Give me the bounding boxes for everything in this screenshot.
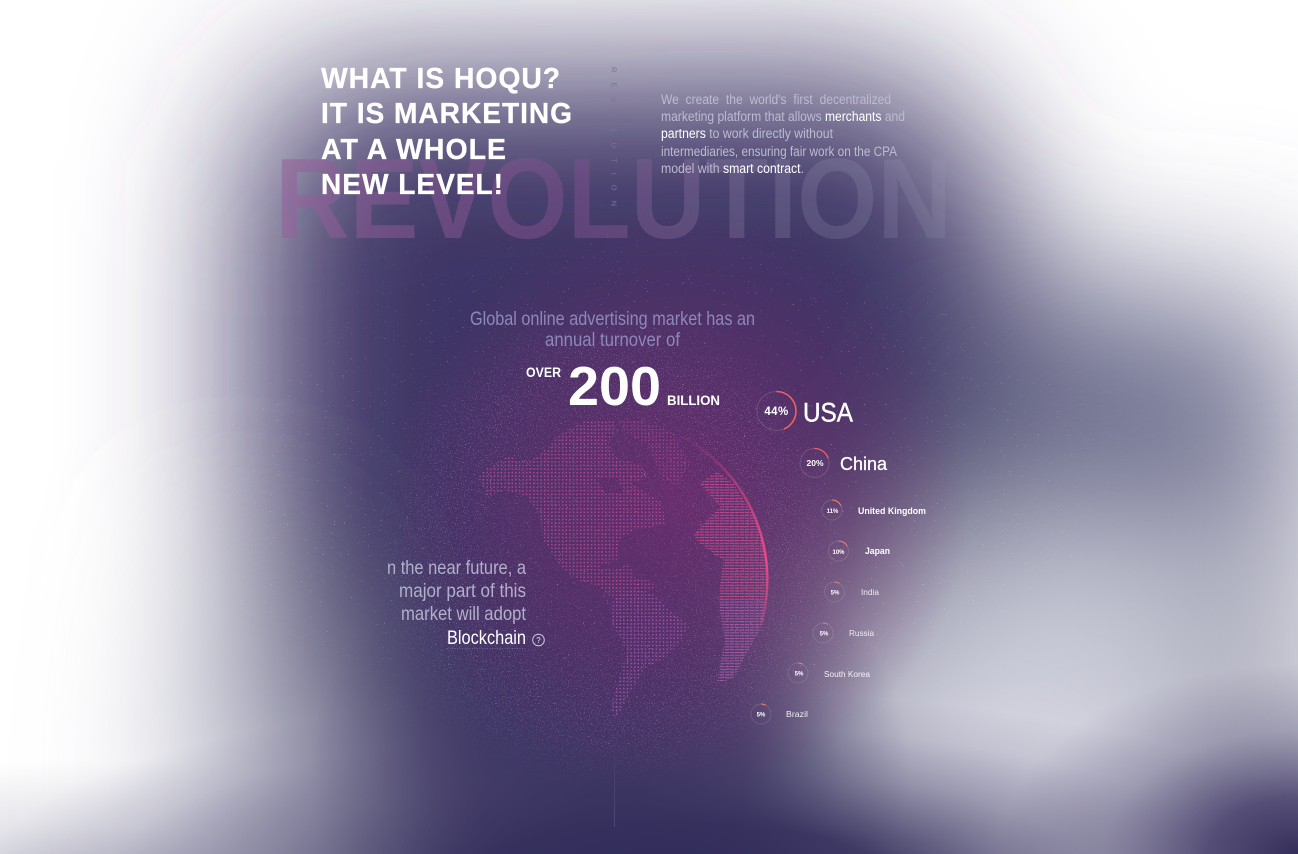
Japan 10%: 10% <box>832 550 845 556</box>
intro paragraph: intermediaries, ensuring fair work on the CPA <box>661 144 897 159</box>
South Korea 5% <box>788 663 870 683</box>
Russia 5%: Russia <box>849 628 874 638</box>
globe speckle halo <box>365 300 855 790</box>
USA 44%: USA <box>803 398 853 428</box>
globe continents <box>475 420 770 717</box>
blockchain note: major part of this <box>399 580 526 602</box>
blockchain note <box>387 557 544 649</box>
title: AT A WHOLE <box>321 134 507 166</box>
blockchain note: Blockchain <box>447 627 526 649</box>
Russia 5%: 5% <box>820 632 829 638</box>
market size heading <box>470 308 755 417</box>
south america <box>610 590 689 717</box>
United Kingdom 11% <box>822 500 926 520</box>
Japan 10% <box>828 541 890 561</box>
market size heading: annual turnover of <box>545 329 680 351</box>
icon: question mark <box>533 634 544 646</box>
intro paragraph: We create the world's first decentralized <box>661 92 891 107</box>
Brazil 5%: Brazil <box>786 709 808 719</box>
China 20%: 20% <box>806 458 824 468</box>
India 5% <box>824 582 879 602</box>
vertical label REVOLUTION: REVOLUTION <box>610 67 618 206</box>
intro paragraph: partners to work directly without <box>661 126 833 141</box>
blockchain note: n the near future, a <box>387 557 526 579</box>
europe and africa <box>693 472 770 600</box>
star field <box>100 190 1180 770</box>
title: IT IS MARKETING <box>321 98 573 130</box>
South Korea 5%: South Korea <box>824 669 870 679</box>
China 20%: China <box>840 453 888 474</box>
market size heading: Global online advertising market has an <box>470 308 755 330</box>
big background word REVOLUTION: REVOLUTION <box>275 136 952 263</box>
South Korea 5%: 5% <box>795 672 804 678</box>
market size heading: BILLION <box>667 393 720 408</box>
title <box>321 63 573 201</box>
intro paragraph <box>661 92 905 176</box>
blockchain note: market will adopt <box>401 603 526 625</box>
United Kingdom 11%: 11% <box>827 509 839 515</box>
market size heading: 200 <box>568 355 661 417</box>
Brazil 5%: 5% <box>757 712 766 718</box>
intro paragraph: model with smart contract. <box>661 161 804 176</box>
China 20% <box>800 448 888 478</box>
Russia 5% <box>813 623 874 643</box>
icon: question mark: ? <box>536 636 541 645</box>
India 5%: India <box>861 587 879 597</box>
market size heading: OVER <box>526 365 561 380</box>
globe limb highlight <box>683 437 767 625</box>
north america <box>475 420 667 600</box>
greenland <box>617 420 690 487</box>
India 5%: 5% <box>831 590 840 596</box>
Japan 10%: Japan <box>865 546 890 557</box>
country list <box>751 392 926 724</box>
Brazil 5% <box>751 704 808 724</box>
stem line below the globe <box>614 735 615 827</box>
title: WHAT IS HOQU? <box>321 63 561 95</box>
USA 44% <box>757 392 853 430</box>
title: NEW LEVEL! <box>321 169 504 201</box>
globe <box>365 300 855 827</box>
United Kingdom 11%: United Kingdom <box>858 506 926 517</box>
intro paragraph: marketing platform that allows merchants and <box>661 109 905 124</box>
USA 44%: 44% <box>764 406 789 418</box>
